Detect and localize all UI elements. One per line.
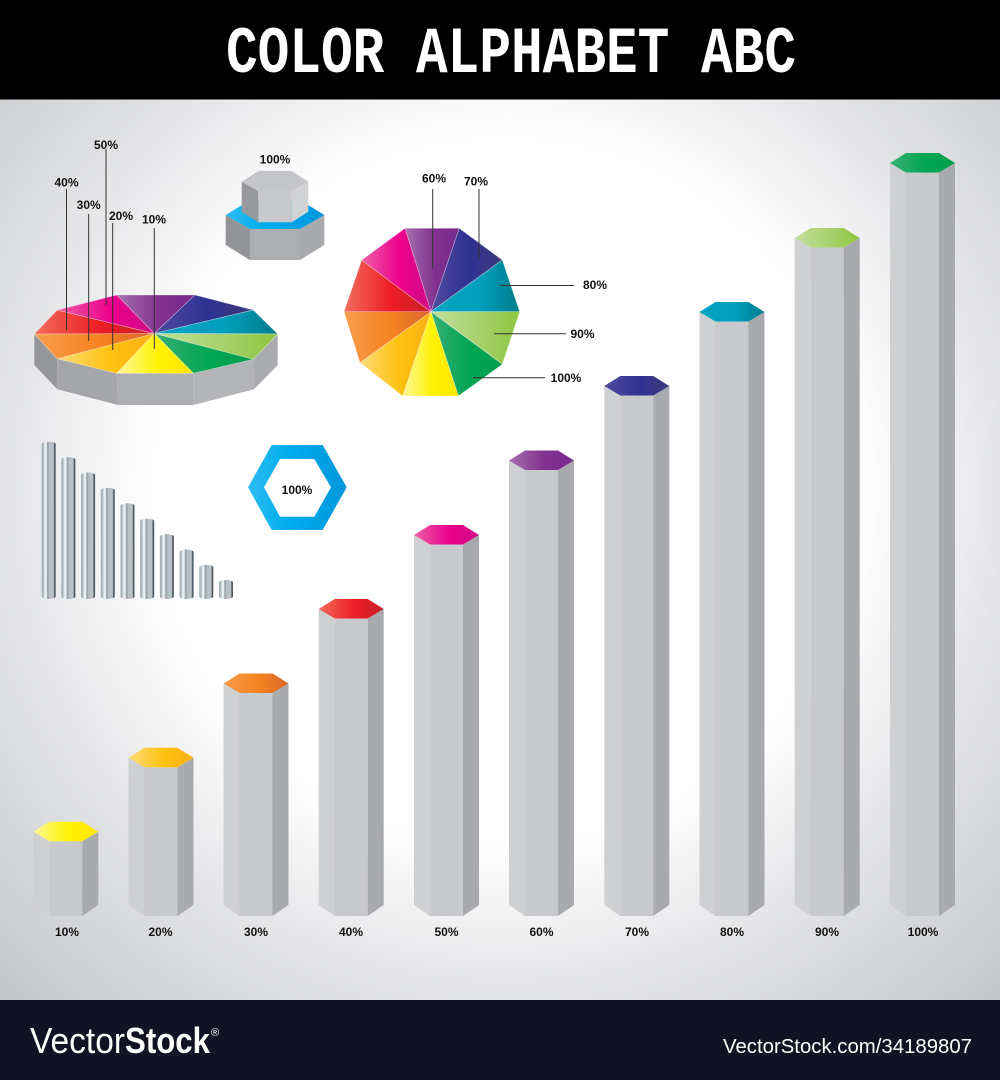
pie labels: [54, 138, 166, 226]
blue hexagon badge: [248, 445, 347, 530]
pie labels: 20%: [109, 209, 133, 223]
flat pie labels: 80%: [583, 278, 607, 292]
footer logo: Stock: [125, 1020, 211, 1061]
column 50%: [414, 525, 479, 916]
stacked hexagon icon: [226, 152, 324, 260]
3D pie chart: [34, 138, 278, 405]
column 100%: [890, 153, 955, 916]
flat pie labels: [422, 172, 607, 385]
footer logo: Vector: [30, 1020, 125, 1061]
column 20%: [128, 748, 194, 916]
footer band: [0, 1000, 1000, 1080]
column labels: 70%: [625, 925, 649, 939]
column labels: 100%: [908, 925, 939, 939]
column 40%: [319, 599, 384, 916]
title band: [0, 0, 1000, 100]
flat pie labels: 90%: [570, 327, 595, 341]
column 30%: [224, 674, 288, 916]
upper hexagon body: [242, 171, 308, 222]
badge label: 100%: [282, 483, 313, 497]
column labels: 60%: [529, 925, 554, 939]
column labels: [55, 925, 939, 939]
pie side wall: [34, 334, 278, 405]
column labels: 20%: [148, 925, 173, 939]
column labels: 40%: [339, 925, 363, 939]
flat pie labels: 60%: [422, 172, 446, 186]
flat pie labels: 70%: [464, 174, 488, 188]
mini cylinder bars: [42, 442, 233, 599]
pie labels: 10%: [142, 212, 166, 226]
flat pie labels: 100%: [551, 371, 582, 385]
column 80%: [700, 302, 764, 916]
column labels: 80%: [720, 925, 744, 939]
footer logo: ®: [211, 1027, 219, 1039]
column labels: 90%: [815, 925, 839, 939]
lower hexagon body: [226, 215, 324, 260]
pie top wedges: [34, 295, 278, 373]
footer logo: [30, 1020, 219, 1061]
pie labels: 30%: [77, 198, 101, 212]
column 70%: [604, 376, 669, 916]
pie labels: 40%: [54, 176, 79, 190]
flat pie callout lines: [433, 189, 574, 378]
pie callout lines: [66, 149, 154, 350]
hexagonal column chart: [33, 153, 955, 939]
pie labels: 50%: [94, 138, 118, 152]
footer image id: VectorStock.com/34189807: [723, 1035, 972, 1058]
column labels: 30%: [244, 925, 268, 939]
blue hexagon top: [226, 200, 324, 229]
flat pie chart: [344, 172, 607, 396]
stacked hexagon label: 100%: [260, 152, 291, 166]
column 10%: [33, 822, 98, 916]
flat pie wedges: [344, 228, 520, 396]
column 60%: [509, 450, 574, 916]
column labels: 10%: [55, 925, 79, 939]
hexagon ring: [248, 445, 347, 530]
column labels: 50%: [434, 925, 459, 939]
column 90%: [795, 228, 860, 916]
title: COLOR ALPHABET ABC: [226, 17, 796, 92]
